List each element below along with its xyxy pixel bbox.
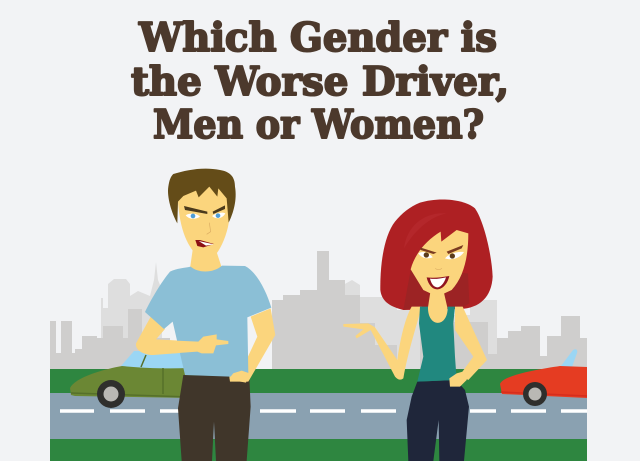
green car xyxy=(70,351,190,408)
nose xyxy=(435,268,442,270)
mouth xyxy=(427,276,449,289)
face xyxy=(177,183,229,259)
forearm and pointing hand xyxy=(170,334,228,354)
tank top xyxy=(417,307,457,382)
title xyxy=(131,15,509,148)
hand on hip xyxy=(449,370,468,387)
left arm with open hand xyxy=(343,307,422,380)
hair back xyxy=(380,199,493,310)
title: Which Gender is xyxy=(138,15,497,61)
eyes xyxy=(418,252,464,259)
upper arm xyxy=(136,315,198,355)
neck xyxy=(190,250,222,275)
grass strip xyxy=(50,369,587,461)
road xyxy=(50,393,587,439)
trousers xyxy=(407,380,469,461)
woman xyxy=(343,199,493,461)
hand on hip xyxy=(229,371,249,383)
hair xyxy=(168,169,236,223)
wheel xyxy=(97,380,125,408)
red car xyxy=(500,349,587,406)
city skyline back layer xyxy=(101,262,497,369)
neck xyxy=(428,290,448,323)
city skyline front layer xyxy=(50,251,587,369)
nose xyxy=(207,223,211,234)
mouth xyxy=(195,240,214,247)
wheel xyxy=(523,382,547,406)
lane markings xyxy=(60,409,587,413)
eyebrows xyxy=(420,245,463,254)
title: Men or Women? xyxy=(153,102,484,148)
face xyxy=(411,230,468,297)
right arm xyxy=(229,308,275,382)
eyebrows xyxy=(184,205,225,214)
eyes xyxy=(186,213,225,219)
right arm xyxy=(455,307,487,380)
man xyxy=(136,169,275,461)
trousers xyxy=(178,375,251,461)
t-shirt xyxy=(145,266,271,377)
title: the Worse Driver, xyxy=(131,59,509,105)
